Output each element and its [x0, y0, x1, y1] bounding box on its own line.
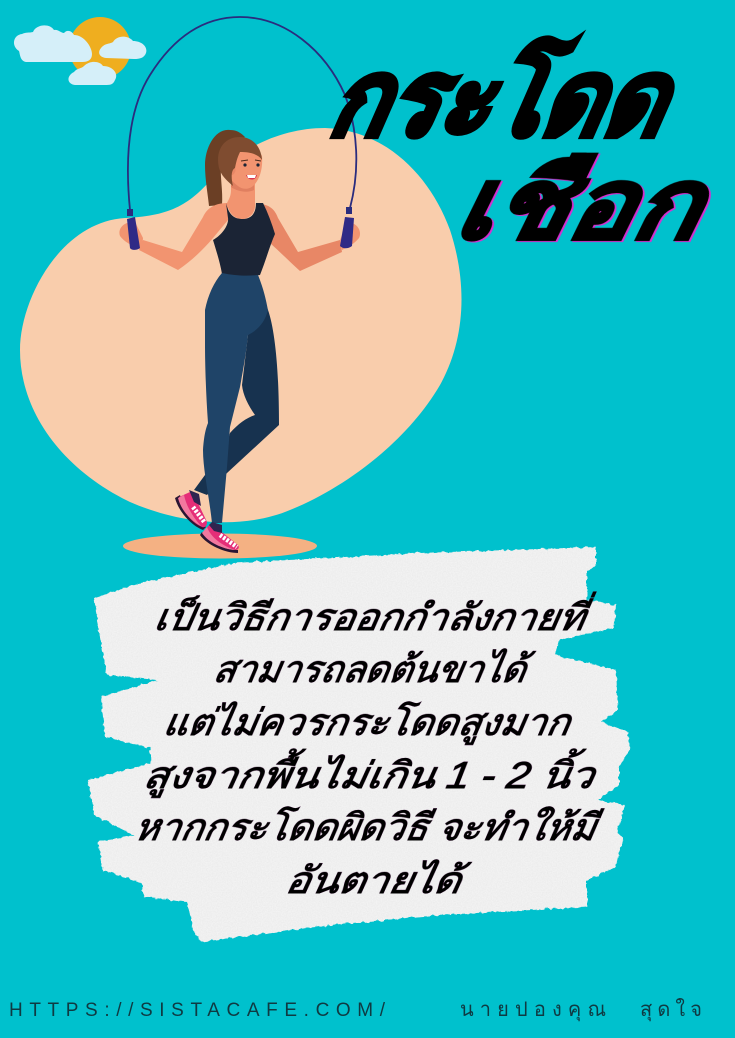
- title line one: กระโดด: [321, 36, 686, 158]
- icon: large cloud: [14, 25, 92, 62]
- left handle: [127, 209, 140, 250]
- footer author: สุดใจ: [640, 998, 702, 1022]
- icon: sun: [69, 17, 131, 79]
- rear shoe: [175, 490, 207, 530]
- footer url: HTTPS://SISTACAFE.COM/: [9, 1000, 386, 1021]
- left hand: [119, 223, 143, 250]
- neck and chest: [227, 178, 255, 219]
- title line two: เชือก: [447, 150, 719, 260]
- text line four: สูงจากพื้นไม่เกิน 1 - 2 นิ้ว: [140, 748, 601, 798]
- jump rope: [128, 17, 356, 210]
- left arm: [139, 203, 228, 270]
- text line six: อันตายได้: [283, 859, 473, 901]
- figure: woman jumping rope: [119, 130, 360, 553]
- ponytail: [205, 130, 245, 206]
- ground shadow ellipse: [123, 534, 317, 558]
- icon: lower cloud: [68, 62, 116, 85]
- right hand: [340, 223, 360, 250]
- footer author: นายปองคุณ: [460, 999, 606, 1022]
- eyes and mouth: [241, 160, 261, 180]
- footer author: [460, 998, 702, 1022]
- right handle: [340, 207, 354, 248]
- hair top: [218, 137, 262, 186]
- neck shadow: [231, 180, 254, 192]
- tank top: [213, 203, 275, 276]
- face: [227, 148, 262, 189]
- title: [321, 36, 719, 260]
- icon: sun and clouds: [14, 17, 146, 85]
- text line one: เป็นวิธีการออกกำลังกายที่: [152, 591, 597, 638]
- front shoe: [200, 522, 239, 553]
- back leg: [194, 300, 279, 495]
- text line two: สามารถลดต้นขาได้: [211, 648, 537, 690]
- front leg: [203, 273, 268, 523]
- text line three: แต่ไม่ควรกระโดดสูงมาก: [160, 701, 576, 745]
- peach blob: [20, 128, 461, 522]
- icon: right cloud: [99, 37, 146, 59]
- text line five: หากกระโดดผิดวิธี จะทำให้มี: [132, 806, 605, 848]
- ear: [224, 164, 236, 176]
- right arm: [262, 204, 342, 271]
- torn paper panel: [88, 547, 630, 942]
- body text: [132, 591, 605, 901]
